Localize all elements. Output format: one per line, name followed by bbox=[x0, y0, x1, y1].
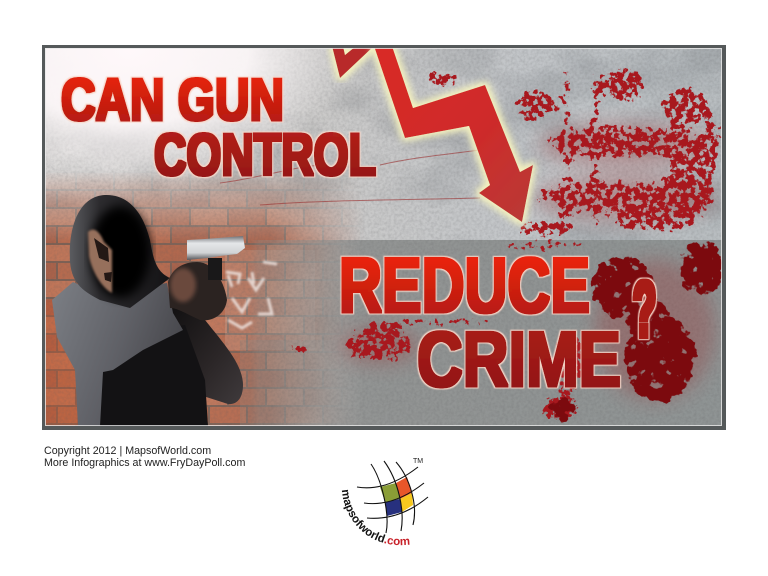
logo: mapsofworld bbox=[342, 458, 428, 546]
logo wordmark: mapsofworld.com bbox=[342, 490, 410, 546]
blood spatter lower wall bbox=[291, 238, 582, 420]
figure: hooded gunman bbox=[52, 195, 245, 426]
face shadow bbox=[90, 206, 150, 298]
heading: can gun control bbox=[60, 76, 378, 178]
eye shadow and mouth bbox=[94, 238, 112, 282]
gunman torso bbox=[76, 325, 208, 426]
heading line: can gun: CAN GUN bbox=[61, 67, 284, 133]
heading line: crime: CRIME bbox=[417, 315, 621, 403]
gun hand bbox=[168, 262, 227, 320]
face bbox=[88, 230, 112, 293]
hairline cracks bbox=[220, 150, 480, 205]
poster panel bbox=[42, 45, 728, 430]
arrow: falling red zigzag bbox=[374, 46, 533, 222]
source line: More Infographics at www.FryDayPoll.com bbox=[44, 457, 245, 469]
gunman grey arm and shoulder bbox=[52, 282, 183, 426]
darker lower wall band bbox=[250, 240, 722, 426]
wall texture bbox=[45, 48, 722, 426]
heading line: control: CONTROL bbox=[154, 122, 376, 188]
wall background bbox=[45, 48, 722, 426]
heading line: reduce: REDUCE bbox=[339, 241, 590, 329]
white wash at top left bbox=[45, 48, 328, 176]
pistol bbox=[187, 236, 245, 280]
trademark: TM bbox=[413, 458, 423, 465]
hood bbox=[70, 195, 170, 308]
poster panel: ? bbox=[633, 265, 656, 353]
soft blood tint bbox=[340, 123, 715, 400]
blood spatter upper right bbox=[422, 60, 724, 240]
copyright text bbox=[44, 445, 245, 469]
brick wall bbox=[45, 170, 365, 428]
gunman sleeve bbox=[172, 308, 243, 404]
heading: reduce crime bbox=[340, 254, 658, 390]
arrow: small upper segment bbox=[332, 46, 374, 78]
chalk graffiti on bricks bbox=[226, 262, 277, 328]
dark blood stain lower right bbox=[546, 238, 728, 424]
logo globe grid lines bbox=[357, 461, 428, 533]
copyright line: Copyright 2012 | MapsofWorld.com bbox=[44, 445, 211, 457]
infographic canvas bbox=[42, 45, 726, 546]
poster inner keyline bbox=[46, 48, 722, 426]
logo globe tiles bbox=[380, 477, 413, 516]
